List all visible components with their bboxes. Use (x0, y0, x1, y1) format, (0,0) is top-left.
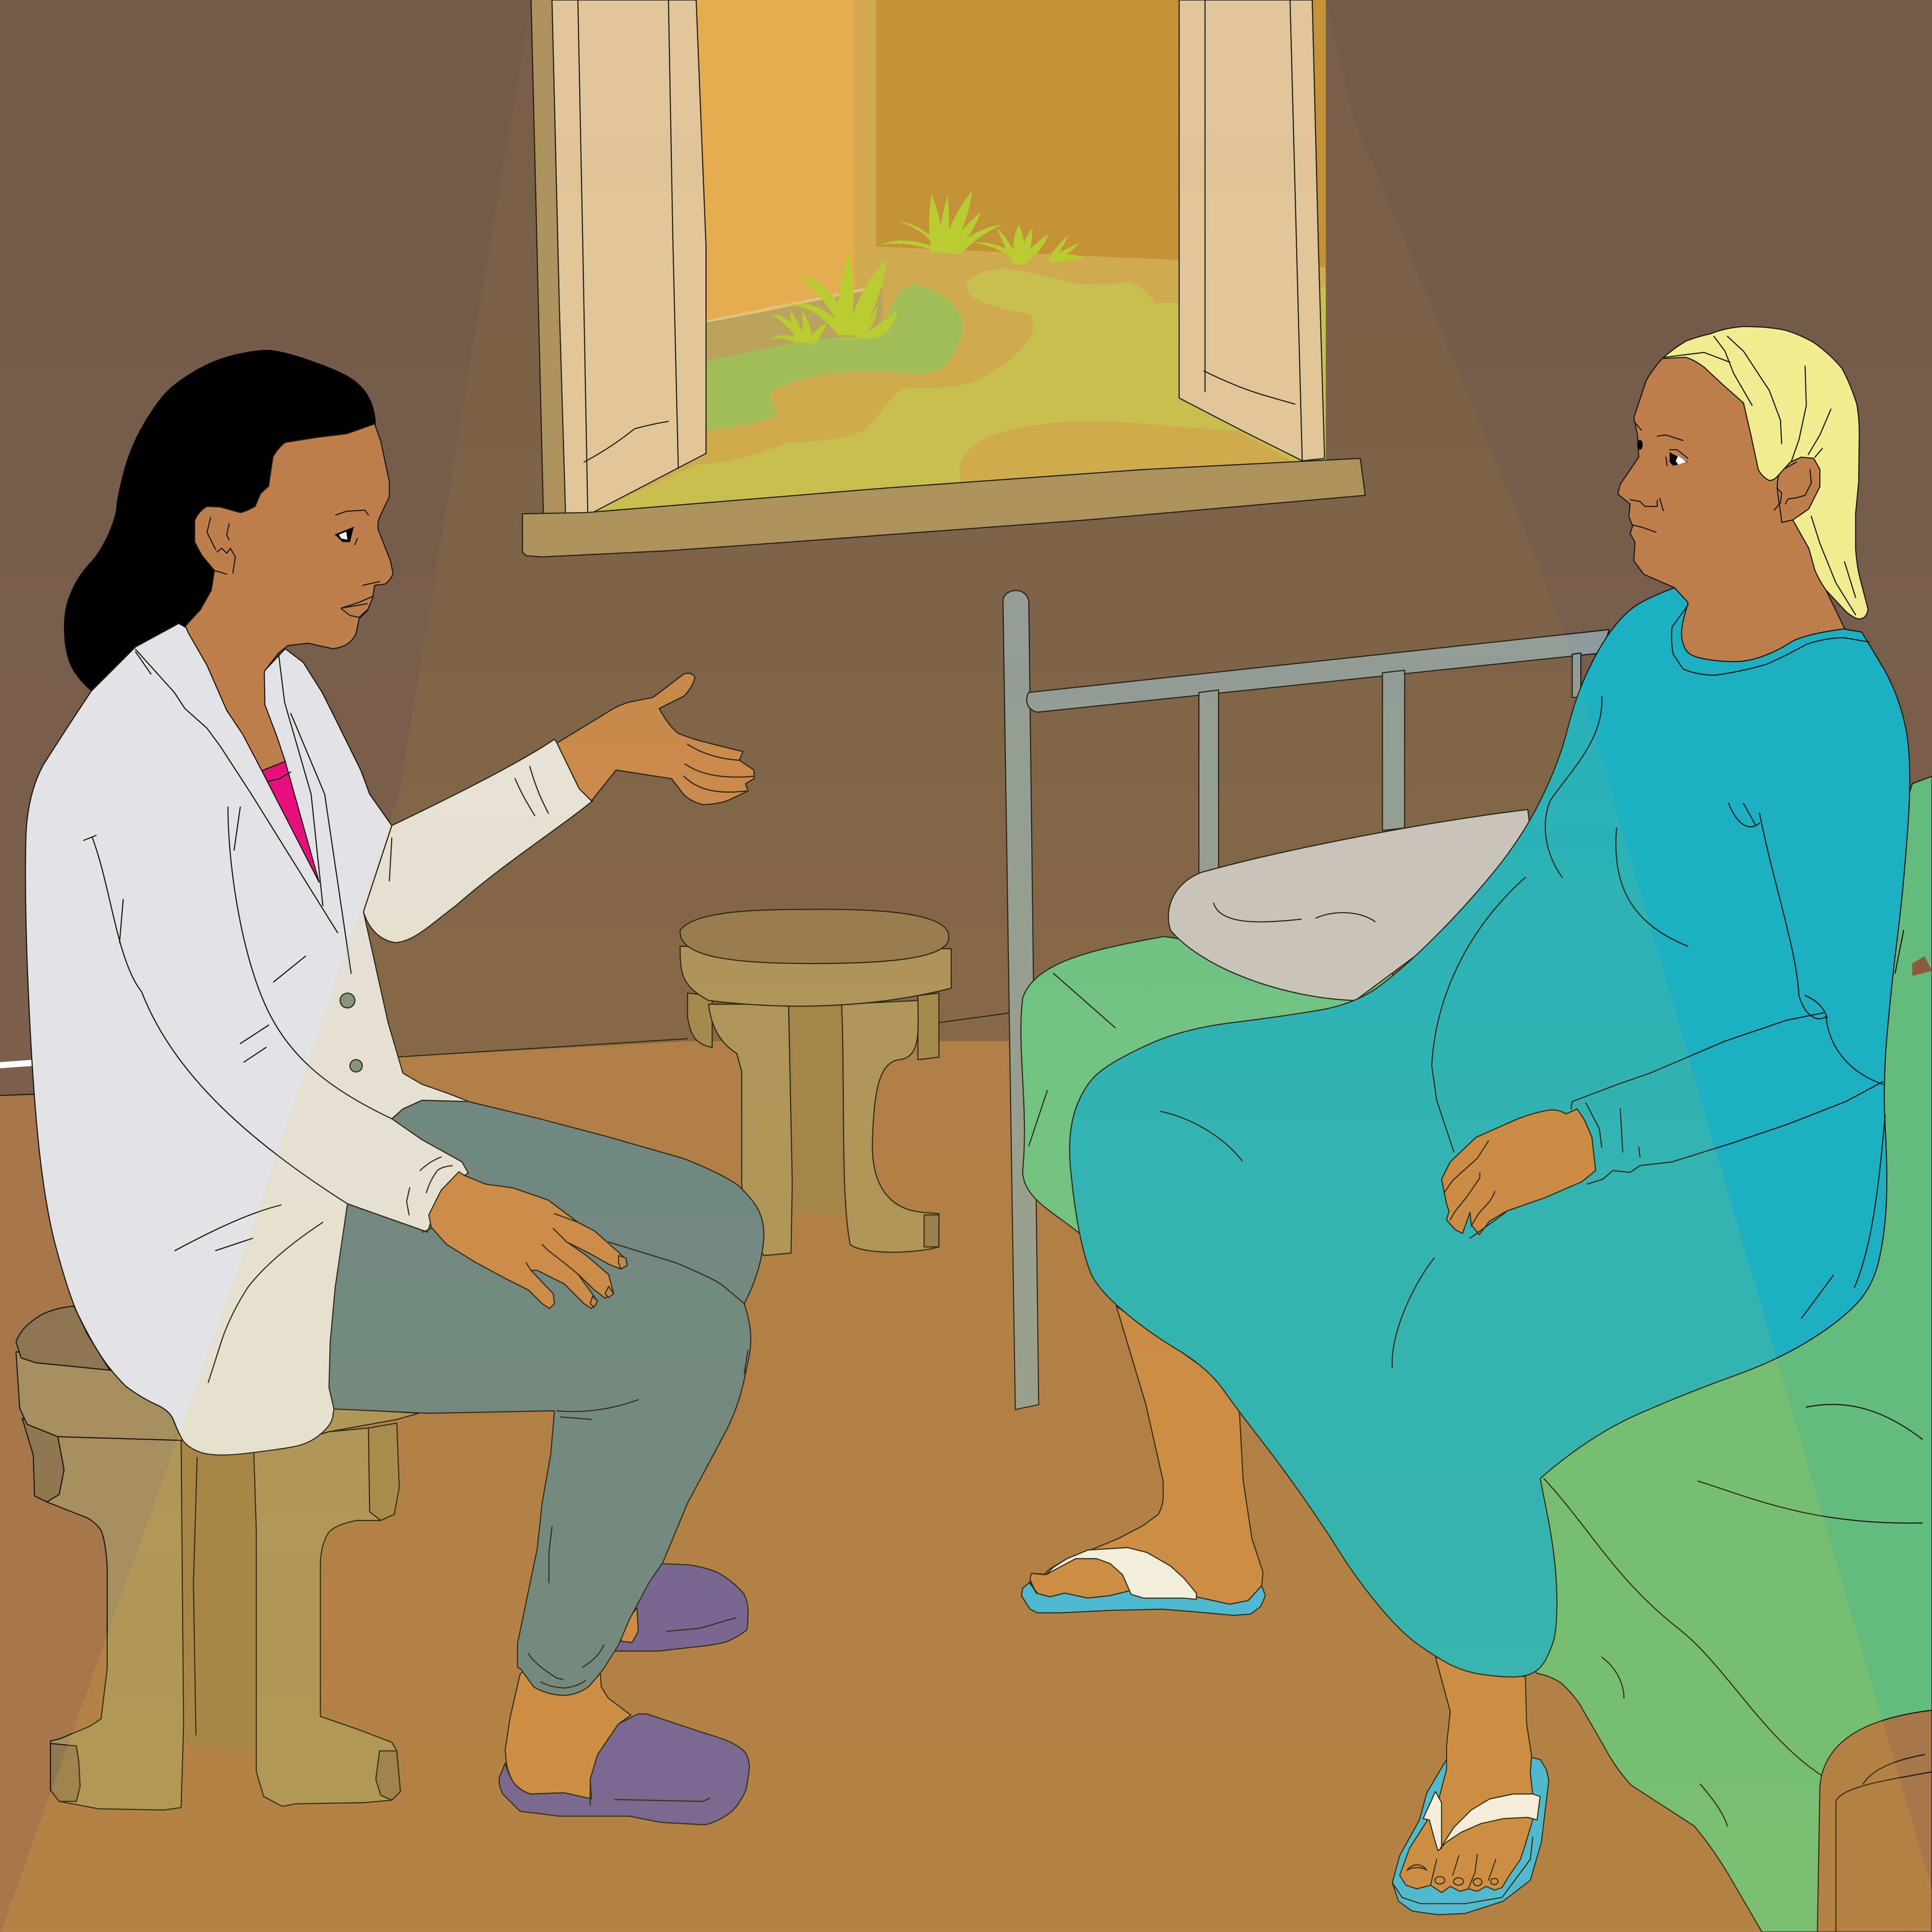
window frame (531, 0, 1326, 514)
doctor trousers (314, 1100, 764, 1695)
patient face features (1630, 422, 1688, 532)
doctor front slipper (499, 1714, 750, 1825)
doctor shirt (262, 762, 319, 882)
patient headscarf (1662, 327, 1868, 619)
patient near leg and sandal (1392, 1657, 1549, 1915)
doctor face features (207, 510, 380, 617)
doctor back slipper (615, 1564, 748, 1651)
doctor hair (64, 350, 376, 691)
pillow (1168, 810, 1534, 1000)
stool front legs (47, 1437, 184, 1810)
doctor raised hand (557, 673, 754, 805)
patient ear (1774, 457, 1820, 522)
grass tufts (769, 191, 1084, 345)
window sill (522, 459, 1365, 557)
patient sleeve lines (1571, 996, 1883, 1184)
doctor coat (25, 623, 468, 1455)
doctor's stool (16, 1306, 419, 1810)
doctor head and neck (185, 424, 393, 771)
bed spindles (1199, 653, 1581, 880)
bed post (1003, 590, 1039, 1410)
outdoor scene (592, 0, 1326, 513)
bed rail (1027, 630, 1609, 712)
patient far leg and sandal (1021, 1306, 1265, 1615)
bed frame (1003, 590, 1609, 1410)
window (522, 0, 1365, 557)
stool rear legs (22, 1418, 64, 1502)
bedside bench corner (1817, 1710, 1932, 1932)
right shutter (1179, 0, 1324, 466)
patient dress (1069, 588, 1910, 1677)
patient head and neck (1618, 347, 1861, 702)
left shutter (552, 0, 706, 514)
doctor front foot (505, 1651, 631, 1799)
doctor sleeve raised arm (364, 739, 592, 942)
background stool (680, 909, 951, 1255)
patient hand (1442, 1109, 1596, 1238)
patient (1021, 327, 1910, 1915)
bed sheet (1021, 776, 1932, 1932)
doctor resting hand (429, 1172, 627, 1309)
stool seat (16, 1352, 419, 1453)
doctor (25, 350, 764, 1825)
